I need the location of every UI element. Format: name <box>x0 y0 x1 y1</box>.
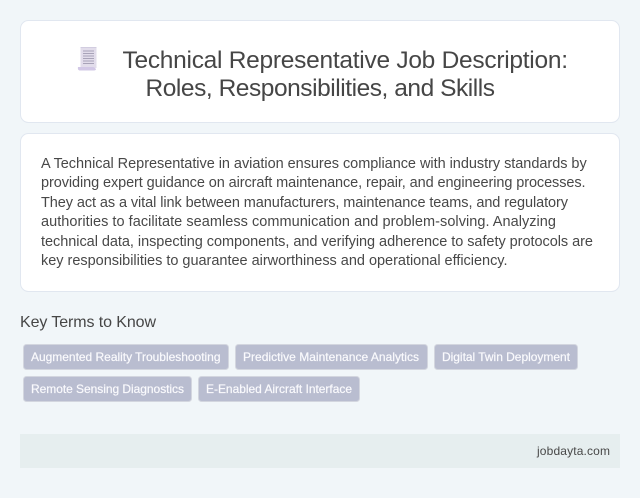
text block: description: A Technical Representative in aviation ensures compliance with industry standards by <box>41 156 587 172</box>
title: Roles, Responsibilities, and Skills <box>146 75 495 102</box>
text block: description: providing expert guidance on aircraft maintenance, repair, and engineering processes. <box>41 175 586 191</box>
panel: header card <box>20 20 620 122</box>
text block: description: key responsibilities to guarantee airworthiness and operational efficiency. <box>41 253 508 269</box>
chip: e-enabled aircraft: E-Enabled Aircraft Interface <box>206 382 352 396</box>
text block: description: technical data, inspecting components, and verifying adherence to safety protocols are <box>41 234 593 250</box>
chip: digital twin: Digital Twin Deployment <box>442 350 571 364</box>
footer <box>20 434 620 468</box>
chip: e-enabled aircraft <box>198 376 360 402</box>
chip: augmented reality: Augmented Reality Troubleshooting <box>31 350 220 364</box>
chip: remote sensing <box>24 376 192 402</box>
text block: description <box>41 156 593 269</box>
text block: description: They act as a vital link between manufacturers, maintenance teams, and regulatory <box>41 195 569 211</box>
key terms chips <box>24 344 578 402</box>
panel: description card <box>20 134 620 292</box>
text block: description: authorities to facilitate seamless communication and problem-solving. Analyzing <box>41 214 556 230</box>
title: Technical Representative Job Description: <box>122 47 568 74</box>
chip: predictive maintenance <box>236 344 428 370</box>
chip: remote sensing: Remote Sensing Diagnostics <box>31 382 184 396</box>
heading: key terms: Key Terms to Know <box>20 314 156 331</box>
chip: predictive maintenance: Predictive Maintenance Analytics <box>243 350 419 364</box>
chip: digital twin <box>434 344 578 370</box>
icon: document scroll <box>78 47 96 70</box>
footer: jobdayta.com <box>536 444 610 458</box>
chip: augmented reality <box>24 344 228 370</box>
title <box>122 47 568 102</box>
